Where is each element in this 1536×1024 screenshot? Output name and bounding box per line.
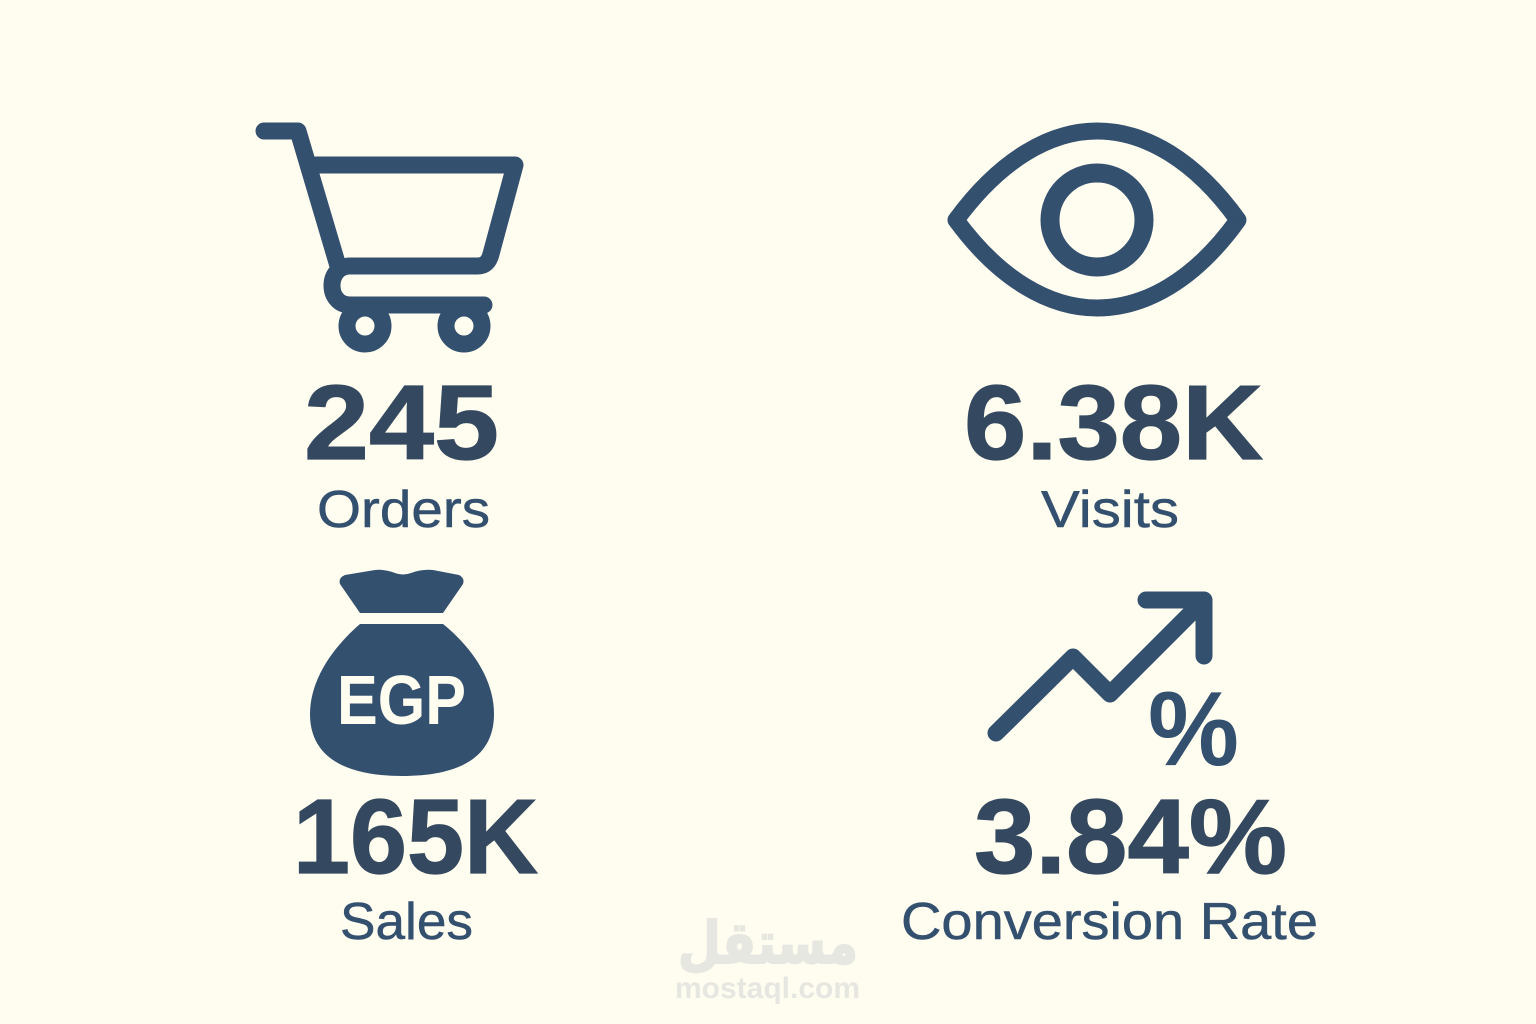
panel: conversion rate	[901, 600, 1318, 951]
panel: visits	[956, 131, 1263, 539]
watermark	[675, 909, 860, 1005]
watermark: mostaql.com: mostaql.com	[675, 972, 860, 1005]
value: 165K: 165K	[293, 778, 538, 896]
value: 6.38K: 6.38K	[964, 364, 1263, 482]
value: 3.84%: 3.84%	[974, 778, 1287, 896]
icon: eye	[956, 131, 1238, 308]
watermark: Arabic logotype: مستقل	[678, 909, 858, 977]
icon: shopping cart	[264, 131, 515, 344]
icon: rising trend arrow	[996, 600, 1204, 733]
icon: money bag	[310, 570, 494, 776]
icon text: EGP: EGP	[337, 661, 466, 739]
panel: orders	[264, 131, 515, 539]
icon: percent sign: %	[1148, 670, 1239, 788]
label: Visits: Visits	[1041, 481, 1179, 539]
label: Orders: Orders	[317, 481, 490, 539]
label: Conversion Rate: Conversion Rate	[901, 893, 1318, 951]
label: Sales: Sales	[340, 893, 473, 951]
panel: sales	[293, 570, 538, 951]
value: 245: 245	[304, 364, 499, 482]
